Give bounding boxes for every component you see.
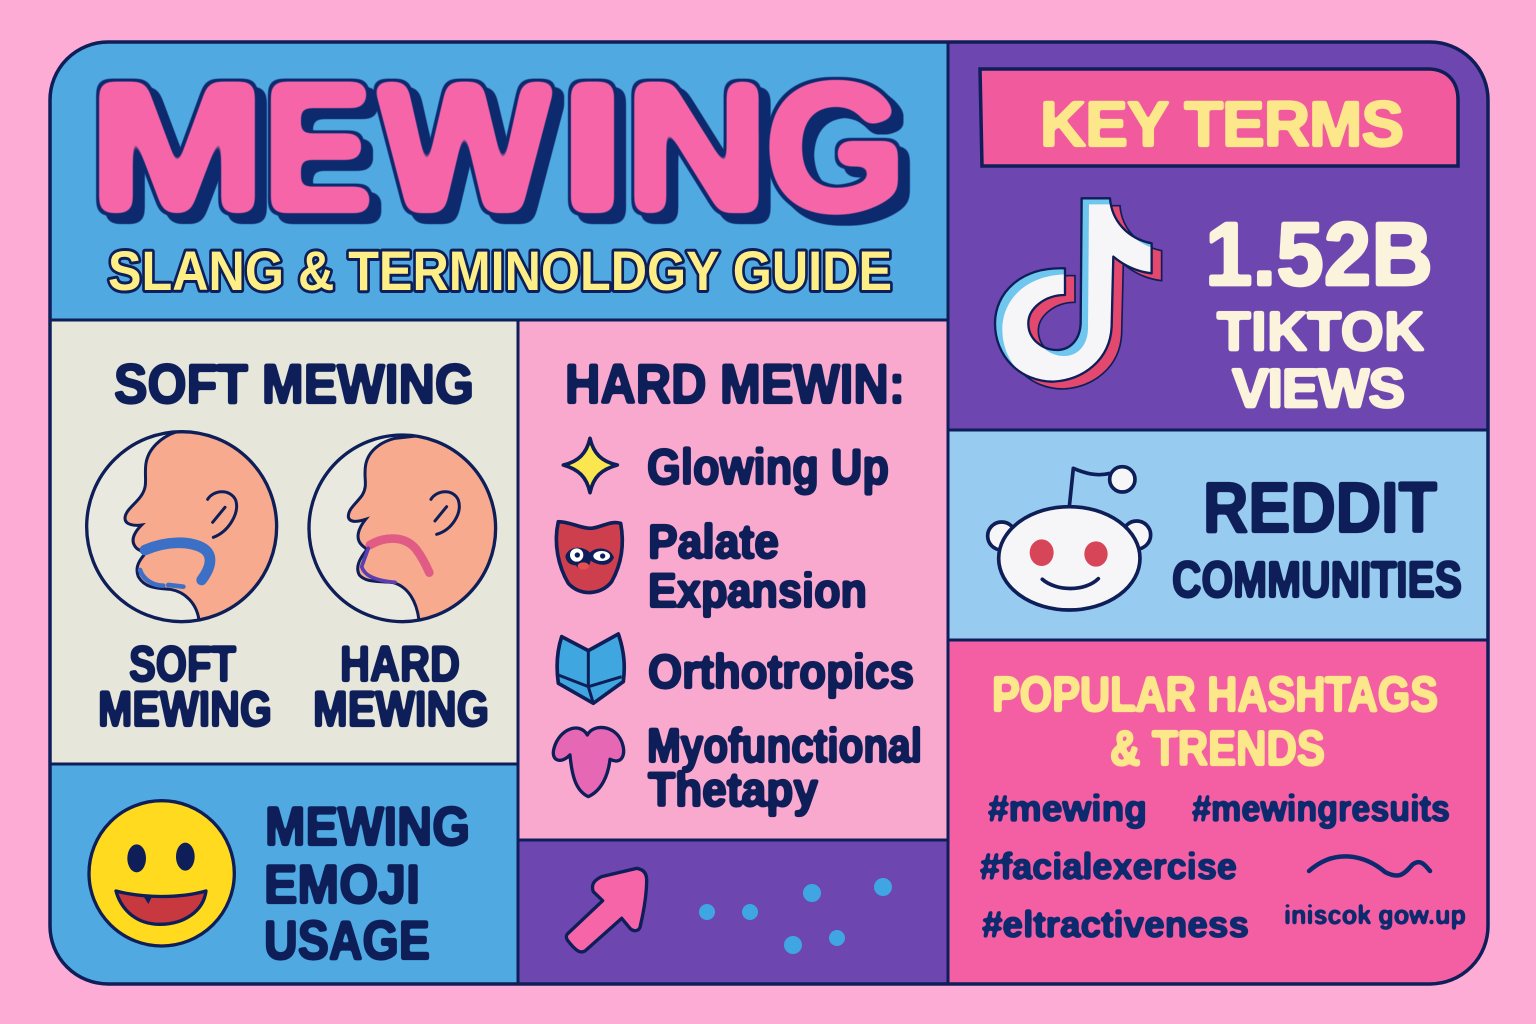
text: tiktok: TIKTOK bbox=[1217, 300, 1424, 362]
heading: and trends: & TRENDS bbox=[1110, 722, 1325, 776]
line: myofunctional: Myofunctional bbox=[647, 720, 922, 773]
text: usage: USAGE bbox=[264, 909, 430, 971]
text: inis cok gow up: iniscok gow.up bbox=[1284, 900, 1466, 930]
line: palate: Palate bbox=[648, 516, 779, 569]
subtitle: SLANG & TERMINOLDGY GUIDE bbox=[108, 239, 892, 302]
icon: tiktok note bbox=[995, 198, 1162, 389]
panel: soft mewing background bbox=[50, 320, 518, 764]
stat: 1.52B: 1.52B bbox=[1205, 205, 1433, 305]
blue dots bbox=[699, 878, 892, 954]
text: communities: COMMUNITIES bbox=[1172, 551, 1462, 608]
banner: key terms bbox=[980, 69, 1458, 166]
hashtag: attractiveness: #eltractiveness bbox=[982, 904, 1249, 945]
panel: hashtags bbox=[980, 668, 1466, 945]
icon: palate mask bbox=[556, 522, 622, 593]
icon: sparkle bbox=[563, 438, 617, 493]
heading: soft mewing: SOFT MEWING bbox=[114, 352, 474, 415]
icon: pink arrow bbox=[566, 868, 647, 952]
panel: hard mewing background bbox=[518, 320, 948, 840]
icon: reddit alien bbox=[988, 467, 1151, 610]
icon: smiley emoji bbox=[89, 801, 234, 946]
panel: soft vs hard mewing bbox=[87, 352, 500, 737]
title: MEWING: M bbox=[88, 45, 266, 249]
icon: soft mewing profile bbox=[87, 427, 283, 627]
panel: arrow and dots background bbox=[518, 840, 948, 984]
squiggle bbox=[1309, 856, 1430, 876]
label: soft mewing second line: MEWING bbox=[98, 681, 272, 737]
panel: key terms background bbox=[948, 42, 1488, 430]
line: expansion: Expansion bbox=[648, 565, 867, 618]
label: hard mewing second line: MEWING bbox=[313, 681, 489, 737]
title: MEWING: G bbox=[765, 45, 906, 249]
text: reddit: REDDIT bbox=[1203, 469, 1437, 548]
label: soft mewing: SOFT bbox=[129, 636, 236, 692]
hashtag: mewing results: #mewingresuits bbox=[1192, 788, 1450, 829]
title: MEWING: N bbox=[624, 45, 769, 249]
panel: hashtags background bbox=[948, 640, 1488, 984]
hashtag: facial exercise: #facialexercise bbox=[980, 846, 1237, 887]
text: views: VIEWS bbox=[1232, 357, 1405, 419]
icon: hard mewing profile bbox=[309, 427, 500, 627]
text: myofunctional therapy bbox=[647, 720, 922, 817]
panel: arrow and dots bbox=[566, 868, 892, 954]
label: hard mewing: HARD bbox=[340, 636, 460, 692]
title: MEWING: I bbox=[557, 45, 628, 249]
panel: emoji background bbox=[50, 764, 518, 984]
heading: hard mewing: HARD MEWIN: bbox=[565, 352, 905, 415]
panel: title background bbox=[50, 42, 948, 320]
banner: key terms: KEY TERMS bbox=[1040, 88, 1404, 160]
title: MEWING: W bbox=[377, 45, 552, 249]
title: MEWING: E bbox=[263, 45, 373, 249]
line: thetapy: Thetapy bbox=[648, 764, 818, 817]
panel: emoji usage bbox=[89, 795, 470, 971]
text: orthotropics: Orthotropics bbox=[648, 646, 914, 699]
heading: popular hashtags: POPULAR HASHTAGS bbox=[992, 668, 1438, 722]
panel: hard mewing list bbox=[553, 352, 922, 817]
text: emoji: EMOJI bbox=[264, 853, 420, 915]
text: palate expansion bbox=[648, 516, 867, 618]
text: mewing: MEWING bbox=[265, 795, 470, 857]
panel: key terms and tiktok bbox=[980, 69, 1458, 419]
text: glowing up: Glowing Up bbox=[647, 439, 889, 495]
icon: tongue shape bbox=[553, 727, 624, 797]
panel: reddit bbox=[988, 467, 1462, 610]
hashtag: mewing: #mewing bbox=[988, 788, 1147, 829]
panel: reddit background bbox=[948, 430, 1488, 640]
icon: open book bbox=[557, 634, 624, 703]
